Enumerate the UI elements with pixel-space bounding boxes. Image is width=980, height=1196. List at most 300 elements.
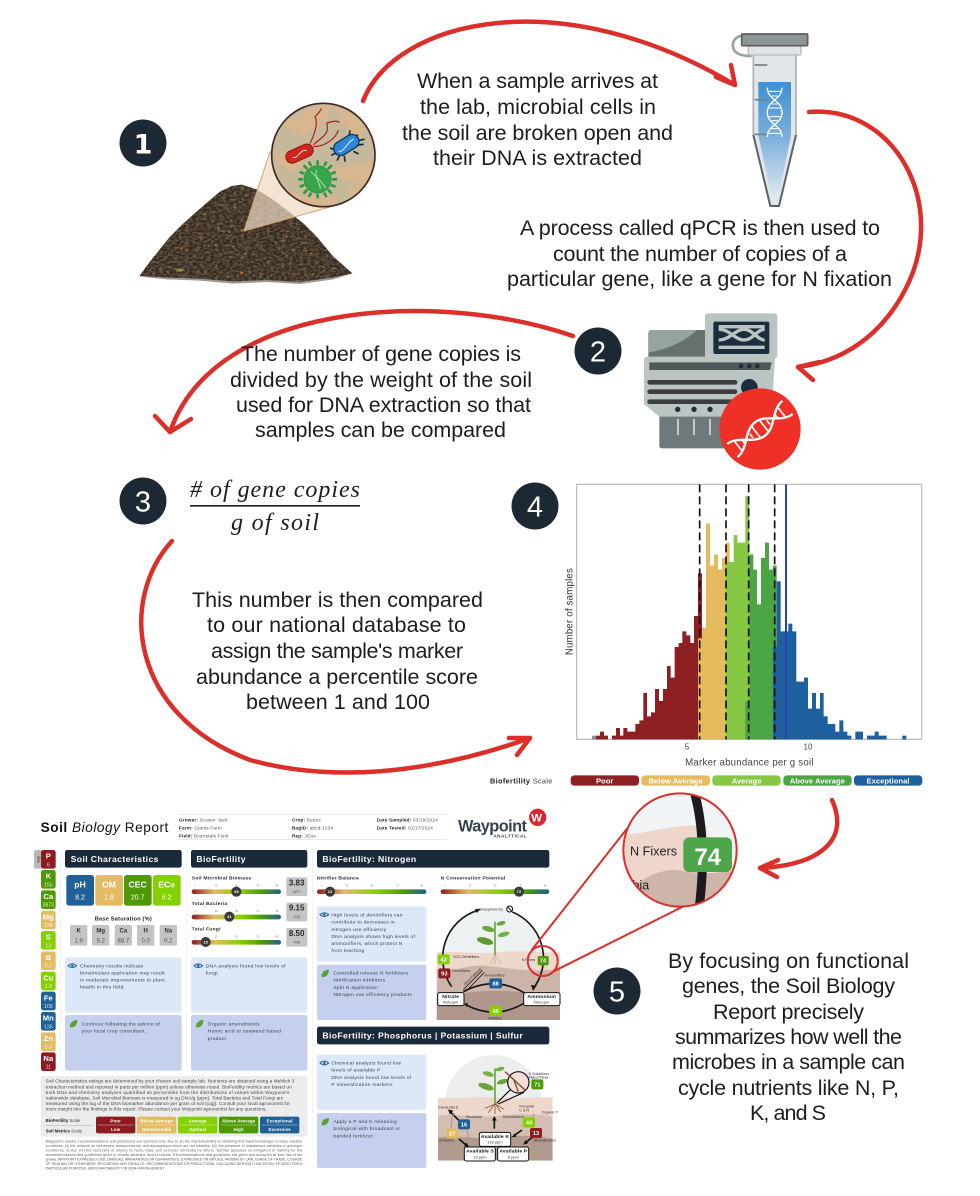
nitrate box: Nitrate	[442, 994, 459, 1000]
score badges: 44	[526, 1120, 533, 1126]
report header metadata: Farm: Giants Farm	[179, 826, 222, 831]
chemistry recommendation: your local crop consultant.	[82, 1029, 146, 1035]
biofertility recommendation: Humic acid or seaweed based	[208, 1029, 281, 1035]
available P box: Available P	[499, 1149, 528, 1155]
gauge: total fungi: 25	[215, 936, 218, 938]
pathway labels: Organic P	[542, 1110, 558, 1114]
gauge: soil microbial biomass: 99	[276, 886, 279, 888]
biofertility scale legend: Biofertility Scale	[490, 776, 552, 785]
gauge: N conservation potential: 75	[519, 886, 523, 888]
base saturation table: 9.2	[97, 939, 105, 945]
pathway labels: Oxidation	[438, 1138, 454, 1142]
text: percentile description: between 1 and 100	[246, 690, 430, 714]
disclaimer: grower. WAYPOINT EXPRESSLY DISCLAIMS ALL WARRANTIES OR GUARANTEES, EXPRESSED OR IMPLIED, ARISING BY LAW, USAGE OF TRADE, COURSE	[46, 1158, 303, 1162]
pathway labels: Nitrifiers	[488, 1016, 502, 1020]
PKS heading	[317, 1027, 549, 1044]
scale legend: Optimal	[189, 1127, 206, 1132]
report explanation panel	[41, 1076, 307, 1137]
nitrogen recommendation	[317, 965, 426, 1020]
plant with root magnifier	[477, 1066, 529, 1114]
gauge: nitrifier balance: 50	[370, 886, 374, 888]
report header metadata: Date Sampled: 03/19/2024	[377, 817, 438, 822]
PKS note: Chemical analysis found low	[331, 1061, 401, 1067]
step 3 number badge: 3	[135, 486, 151, 518]
nitrate box	[438, 993, 464, 1006]
gauge: total bacteria: 25	[215, 911, 218, 913]
base saturation table: 0.2	[164, 939, 173, 945]
report header metadata: Crop: Beans	[292, 817, 321, 822]
scale legend: BioFertility Scale	[46, 1118, 81, 1123]
soil metric tiles: 20.7	[131, 895, 145, 902]
Waypoint logo: ANALYTICAL	[493, 833, 527, 838]
step 1 number badge: 1	[134, 130, 152, 160]
pathway labels: Reduction	[466, 1115, 482, 1119]
report header metadata: Field: Beanstalk Field	[179, 834, 229, 839]
gauge: total fungi: 99	[276, 936, 279, 938]
text: step 1 description: the lab, microbial cells in	[420, 95, 656, 119]
gauge: soil microbial biomass: Soil Microbial Biomass	[192, 876, 251, 882]
text: qPCR description: count the number of copies of a	[553, 242, 847, 266]
text: percentile description: to our national database to	[207, 613, 466, 637]
gauge: total fungi: 8.50	[289, 929, 305, 938]
formula: gene copies per gram of soil	[190, 477, 360, 536]
gauge: total fungi: 50	[235, 936, 239, 938]
tube DNA helix	[767, 88, 782, 137]
gauge: soil microbial biomass: ppm	[293, 889, 301, 894]
gauge: total bacteria: cqg	[293, 914, 300, 919]
pathway labels	[438, 1072, 558, 1142]
report header metadata: Rep: JDoe	[292, 834, 316, 839]
base saturation table: 0.0	[142, 939, 150, 945]
step 4 number badge: 4	[527, 492, 543, 524]
plant	[476, 920, 510, 965]
base saturation table: Mg	[96, 929, 105, 935]
illustration: DNA sample tube	[733, 34, 808, 206]
gauge: nitrifier balance: 25	[345, 886, 349, 888]
gauge: soil microbial biomass: 75	[256, 886, 260, 888]
y axis label: Number of samples	[564, 568, 575, 655]
text: normalization description: divided by the weight of the soil	[230, 368, 532, 392]
text: soil biology report summary: microbes in a sample can	[672, 1050, 905, 1074]
base saturation table: 1.9	[75, 939, 83, 945]
text: percentile description: assign the sample's marker	[211, 639, 463, 663]
blue bacterium	[331, 131, 364, 161]
gauge: total bacteria: 50	[235, 911, 239, 913]
score badges: 93	[441, 971, 447, 977]
soil element column: Mg	[43, 912, 54, 921]
PKS note: levels of available P	[331, 1068, 381, 1074]
base saturation table: K	[77, 929, 82, 935]
gauge: N conservation potential: 1	[444, 886, 446, 888]
soil characteristics heading	[65, 850, 182, 868]
Waypoint logo	[458, 809, 546, 838]
report header metadata: BagID: abcd-1234	[292, 826, 333, 831]
soil element column: 11	[46, 1065, 51, 1071]
chemistry recommendation: Continue following the advice of	[82, 1022, 160, 1028]
biofertility scale legend: Below Average	[649, 776, 703, 785]
DNA note: DNA analysis found low levels of	[206, 963, 286, 969]
step 3 number badge	[120, 478, 166, 524]
text: qPCR description: A process called qPCR is then used to	[520, 216, 880, 240]
soil metric tiles: CEC	[129, 880, 148, 890]
red DNA badge	[719, 388, 801, 470]
report explanation panel: Soil Characteristics ratings are determined by your chosen soil sample lab. Nutrients are obtained using a Mehlich 3	[46, 1079, 295, 1084]
gauge: nitrifier balance: 12	[328, 889, 333, 894]
DNA note	[191, 957, 307, 1013]
text: soil biology report summary: K, and S	[750, 1101, 826, 1125]
Waypoint logo: W	[531, 812, 542, 824]
gauge: soil microbial biomass: 49	[234, 889, 239, 894]
pathway labels: Ammonifiers	[484, 974, 505, 978]
PKS heading: BioFertility: Phosphorus | Potassium | Sulfur	[322, 1031, 523, 1041]
step 1 number badge	[120, 120, 166, 166]
scale legend	[46, 1117, 299, 1134]
text: step 1 description: the soil are broken open and	[402, 121, 673, 145]
text: qPCR description	[507, 216, 892, 291]
red arrow: soil to tube	[363, 22, 735, 101]
text: step 1 description: When a sample arrives at	[417, 69, 658, 93]
gauge: total bacteria: 9.15	[289, 904, 305, 913]
step 2 number badge	[574, 328, 622, 374]
text: soil biology report summary: Report precisely	[713, 1000, 864, 1024]
text: soil biology report summary	[668, 949, 909, 1125]
scale legend: Questionable	[142, 1127, 172, 1132]
available S box: 13 ppm	[473, 1154, 487, 1159]
gauge: N conservation potential: 50	[494, 886, 497, 888]
score badges	[446, 1079, 543, 1138]
pathway labels: Solubilization	[503, 1115, 524, 1119]
biofertility recommendation: Organic amendments	[208, 1022, 260, 1028]
gauge: N conservation potential	[441, 876, 549, 897]
soil element column: 1.9	[45, 984, 52, 990]
soil element column: 135	[44, 1024, 53, 1030]
histogram bars	[592, 496, 906, 739]
gauge: total bacteria: 75	[256, 911, 260, 913]
callout: magnified N fixers score	[620, 793, 740, 913]
report explanation panel: nationwide database. Soil Microbial Biomass is measured in ug DNA/g (ppm). Total Bacteria and Total Fungi are	[46, 1096, 284, 1101]
panel: soil characteristics	[65, 850, 182, 1071]
text: qPCR description: particular gene, like a gene for N fixation	[507, 267, 892, 291]
soil pile	[137, 183, 357, 284]
pathway labels	[452, 955, 535, 1020]
report explanation panel: extraction method and reported in parts per million (ppm) unless otherwise noted. BioFertility metrics are based on	[46, 1084, 292, 1089]
nitrogen note: DNA analysis shows high levels of	[331, 934, 416, 940]
score badges: 45	[493, 1009, 499, 1015]
pathway labels: Short Pathway	[463, 967, 483, 986]
available S box: Available S	[466, 1149, 494, 1155]
report header metadata	[178, 814, 447, 839]
PKS recommendation: biological with broadcast or	[333, 1126, 401, 1132]
soil element column: 6	[47, 862, 50, 868]
soil element column	[34, 850, 56, 1071]
scale legend: Poor	[110, 1118, 121, 1123]
soil element column: 13	[45, 943, 51, 949]
soil element column: 228	[44, 923, 53, 929]
text: normalization description	[230, 342, 532, 442]
soil element column: Na	[43, 1054, 54, 1063]
callout: magnified N fixers score: N Fixers	[630, 844, 677, 858]
available P box	[498, 1147, 529, 1161]
report explanation panel: both DNA and chemistry analyses quantified as percentiles from the distributions of values within Waypoint's	[46, 1090, 290, 1095]
scale legend: Exceptional	[267, 1118, 293, 1123]
ammonium box: Ammonium	[527, 994, 556, 1000]
available K box: Available K	[481, 1134, 509, 1140]
red arrow: machine to calculation	[155, 311, 573, 432]
biofertility recommendation: product.	[208, 1036, 228, 1042]
gauge: total fungi: 15	[203, 939, 209, 944]
disclaimer: OF DEALING OR OTHERWISE, REGARDING ANY RESULTS, RECOMMENDATIONS OR PREDICTIONS, INCLUDING WITHOUT LIMITATION, FITNESS FOR A	[46, 1162, 303, 1166]
text: soil biology report summary: summarizes how well the	[675, 1025, 902, 1049]
soil metric tiles: 8.2	[75, 895, 85, 902]
step 5 number badge: 5	[609, 976, 625, 1008]
pathway labels: Mineralization	[533, 1138, 556, 1142]
nitrogen recommendation: Nitrification inhibitors	[333, 978, 386, 984]
nitrogen note: High levels of denitrifiers can	[331, 913, 403, 919]
soil element column: 3873	[42, 903, 54, 909]
soil element column: 155	[44, 882, 53, 888]
gauge: nitrifier balance: 75	[396, 886, 399, 888]
gauge: total fungi	[192, 926, 307, 947]
report explanation panel: measured using the log of the DNA biomarker abundance per gram of soil (cqg). Consult your local agronomist for	[46, 1101, 290, 1106]
histogram and biofertility scale	[490, 484, 922, 786]
nitrogen recommendation: Controlled release N fertilizers	[333, 971, 408, 977]
biofertility scale legend: Exceptional	[867, 776, 909, 785]
red arrow: calculation to histogram	[141, 541, 530, 773]
panel: biofertility	[191, 850, 307, 1071]
pathway labels: Elemental S	[438, 1105, 459, 1109]
text: soil biology report summary: cycle nutrients like N, P,	[678, 1076, 899, 1100]
PKS note	[317, 1055, 426, 1110]
report header metadata: Grower: Grower Jack	[179, 817, 228, 822]
nitrogen note: nitrogen use efficiency	[331, 927, 387, 933]
disclaimer: Waypoint's results, recommendations and predictions are opinions only, due to: (i) the impracticability of obtaining first-hand knowledge of many variable	[46, 1140, 302, 1144]
soil element column: 109	[44, 1004, 53, 1010]
soil metric tiles: 6.2	[162, 895, 172, 902]
PKS recommendation: banded fertilizer.	[333, 1133, 374, 1139]
pathway labels: Inorganic	[519, 1104, 535, 1108]
gauge: soil microbial biomass: 50	[235, 886, 239, 888]
text: normalization description: used for DNA extraction so that	[236, 393, 531, 417]
biofertility scale legend: Average	[732, 776, 762, 785]
biofertility scale legend	[490, 775, 922, 786]
soil element column: P	[46, 852, 51, 861]
score badges	[438, 954, 549, 1016]
soil element column: Fe	[44, 993, 53, 1002]
gauge: nitrifier balance: Nitrifier Balance	[317, 876, 359, 882]
formula: gene copies per gram of soil: g of soil	[231, 510, 319, 536]
callout: magnified N fixers score: bia	[632, 878, 650, 892]
chemistry note	[65, 957, 182, 1013]
available K box: 118 ppm	[487, 1140, 503, 1145]
PKS note: P mineralization markers.	[331, 1082, 394, 1088]
biofertility heading	[191, 850, 307, 868]
DNA note: fungi.	[206, 970, 219, 976]
available P box: 6 ppm	[508, 1154, 520, 1159]
red bacterium	[284, 108, 339, 165]
gauge: nitrifier balance	[317, 876, 426, 897]
gauge: total fungi: 1	[194, 936, 196, 938]
nitrogen heading: BioFertility: Nitrogen	[322, 854, 416, 864]
available S box	[464, 1147, 495, 1161]
gauge: N conservation potential: 25	[469, 886, 472, 888]
gauge: nitrifier balance: 1	[321, 886, 323, 888]
x axis labels: 5	[685, 743, 690, 752]
x axis labels: 10	[804, 743, 813, 752]
base saturation table	[70, 917, 177, 946]
base saturation table: H	[144, 929, 148, 935]
text: percentile description: This number is then compared	[192, 588, 483, 612]
PKS recommendation: Apply a P and K releasing	[333, 1119, 397, 1125]
magnified microbes circle	[272, 103, 377, 208]
soil element column: Cu	[43, 973, 54, 982]
gauge: total bacteria: Total Bacteria	[192, 901, 228, 907]
disclaimer: PARTICULAR PURPOSE, MERCHANTABILITY OR NON-INFRINGEMENT	[46, 1167, 165, 1171]
gauge: N conservation potential: N Conservation Potential	[441, 876, 506, 882]
gauge: total bacteria: 1	[194, 911, 196, 913]
gauge: total bacteria: 41	[227, 914, 232, 919]
text: step 1 description	[402, 69, 673, 170]
callout: red circle on N fixers score with connector lines	[528, 828, 684, 976]
scale legend: Above Average	[222, 1118, 256, 1123]
base saturation table: Ca	[120, 929, 128, 935]
score badges: 88	[493, 981, 499, 987]
disclaimer: recommendations and guidelines given in results obtained, and/or results. Recommendations and guidelines are given and accepted at sole risk of the	[46, 1153, 302, 1157]
text: percentile description	[192, 588, 483, 714]
nitrogen cycle diagram	[437, 906, 560, 1020]
biofertility scale legend: Poor	[596, 776, 613, 785]
score badges: 27	[449, 1131, 455, 1137]
available K box	[479, 1132, 511, 1146]
chemistry note: in moderate improvements to plant	[80, 978, 165, 984]
gauge: soil microbial biomass: 25	[215, 886, 218, 888]
illustration: qPCR machine	[644, 313, 801, 470]
nitrate box: N/A ppm	[443, 1000, 459, 1005]
score badges: 71	[534, 1082, 540, 1088]
chemistry note: Chemistry results indicate	[80, 963, 144, 969]
disclaimer: conditions, (ii) the reliance on inferences, measurements, and assumptions which are not infallible, (iii) the presence of unbalanced variables or genotype	[46, 1144, 302, 1148]
soil element column: Mn	[43, 1014, 54, 1023]
red arrow: histogram legend to magnified score	[760, 800, 837, 877]
soil characteristics heading: Soil Characteristics	[71, 854, 159, 864]
vertical dividers	[61, 850, 313, 1157]
nutrient arrows	[450, 1111, 534, 1147]
disclaimer	[46, 1140, 303, 1171]
magnifying cone	[244, 152, 333, 231]
text: soil biology report summary: genes, the Soil Biology	[682, 974, 895, 998]
step 4 number badge	[512, 482, 558, 530]
ammonium box: N/A ppm	[534, 1000, 550, 1005]
soil metric tiles	[66, 875, 181, 906]
step 5 number badge	[594, 968, 640, 1014]
soil element column: 0.7	[45, 964, 52, 970]
x axis labels	[685, 743, 813, 769]
pathway labels: Denitrifiers	[452, 969, 470, 973]
soil element column: Soy	[36, 855, 40, 863]
soil element column: Ca	[43, 892, 54, 901]
gauge: N conservation potential: 99	[544, 886, 547, 888]
percentile cut-offs	[700, 484, 775, 739]
chemistry note: biostimulant application may result	[80, 970, 165, 976]
scale legend: High	[234, 1127, 244, 1132]
score badges: 16	[461, 1122, 467, 1128]
atmosphere label: Atmosphere N2	[478, 907, 503, 911]
gauge: soil microbial biomass	[192, 876, 307, 897]
soil metric tiles: ECe	[158, 880, 175, 890]
score 74: 74	[694, 844, 722, 871]
biofertility scale legend: Above Average	[790, 776, 845, 785]
gauge: N conservation potential: 72	[517, 889, 522, 894]
scale legend: Average	[189, 1118, 207, 1123]
base saturation table: Na	[165, 929, 173, 935]
gauge: nitrifier balance: 99	[420, 886, 424, 888]
gauge: total fungi: 75	[256, 936, 260, 938]
green microbe	[299, 161, 336, 197]
text: normalization description: samples can be compared	[255, 418, 506, 442]
soil element column: K	[46, 872, 52, 881]
gauge: total bacteria: 99	[276, 911, 279, 913]
report explanation panel: more insight into the findings in this report. Please contact your Waypoint agronomist for any questions.	[46, 1107, 267, 1112]
soil metric tiles: pH	[74, 880, 86, 890]
scale legend: Excessive	[268, 1127, 291, 1132]
soil element column: B	[46, 953, 52, 962]
ammonium box	[524, 993, 560, 1006]
scale legend: Soil Metrics Scale	[46, 1129, 83, 1134]
text: step 1 description: their DNA is extracted	[433, 146, 642, 170]
nitrogen note: ammonifiers, which protect N	[331, 941, 403, 947]
gauge: total fungi: Total Fungi	[192, 926, 221, 932]
nitrogen note	[317, 906, 426, 962]
nitrogen note: contribute to decreases in	[331, 920, 395, 926]
pathway labels: N2O Denitrifiers	[453, 955, 480, 959]
formula: gene copies per gram of soil: # of gene copies	[190, 477, 360, 503]
text: soil biology report summary: By focusing on functional	[668, 949, 909, 973]
nitrogen recommendation: Split N application	[333, 985, 378, 991]
base saturation table: 88.7	[118, 939, 130, 945]
soil element column: 2.3	[45, 1045, 52, 1051]
pathway labels: C & N	[519, 1108, 529, 1112]
text: percentile description: abundance a percentile score	[196, 665, 478, 689]
pathway labels: Mycorrhizae	[529, 1076, 549, 1080]
PKS recommendation	[317, 1113, 426, 1168]
PKS cycle diagram	[438, 1055, 558, 1161]
sample value line	[783, 484, 789, 739]
gauge: soil microbial biomass: 1	[194, 886, 196, 888]
chemistry note: health in this field.	[80, 985, 125, 991]
soil element column: S	[46, 933, 51, 942]
score badges: 13	[533, 1131, 539, 1137]
score badges: 74	[540, 959, 547, 965]
gauge: soil microbial biomass: 3.83	[289, 878, 305, 887]
pathway labels: K Solubilizer	[529, 1072, 550, 1076]
Waypoint logo: Waypoint	[458, 817, 528, 835]
soil metric tiles: 1.8	[104, 895, 114, 902]
nitrogen recommendation: Nitrogen use efficiency products	[333, 992, 412, 998]
scale legend: Below Average	[140, 1118, 174, 1123]
soil metric tiles: OM	[102, 880, 116, 890]
biofertility heading: BioFertility	[196, 854, 246, 864]
score badges: 42	[441, 957, 447, 963]
scale legend: Low	[111, 1127, 121, 1132]
soil element column: Zn	[44, 1034, 53, 1043]
illustration: soil pile with magnified microbes	[137, 103, 377, 284]
nitrogen note: from leaching	[331, 948, 365, 954]
Soil Biology Report thumbnail	[34, 809, 560, 1171]
plot frame	[577, 484, 922, 739]
x axis labels: Marker abundance per g soil	[685, 758, 813, 769]
red arrow: tube to qPCR machine	[798, 112, 921, 380]
biofertility recommendation	[191, 1015, 307, 1071]
step 2 number badge: 2	[590, 336, 606, 368]
